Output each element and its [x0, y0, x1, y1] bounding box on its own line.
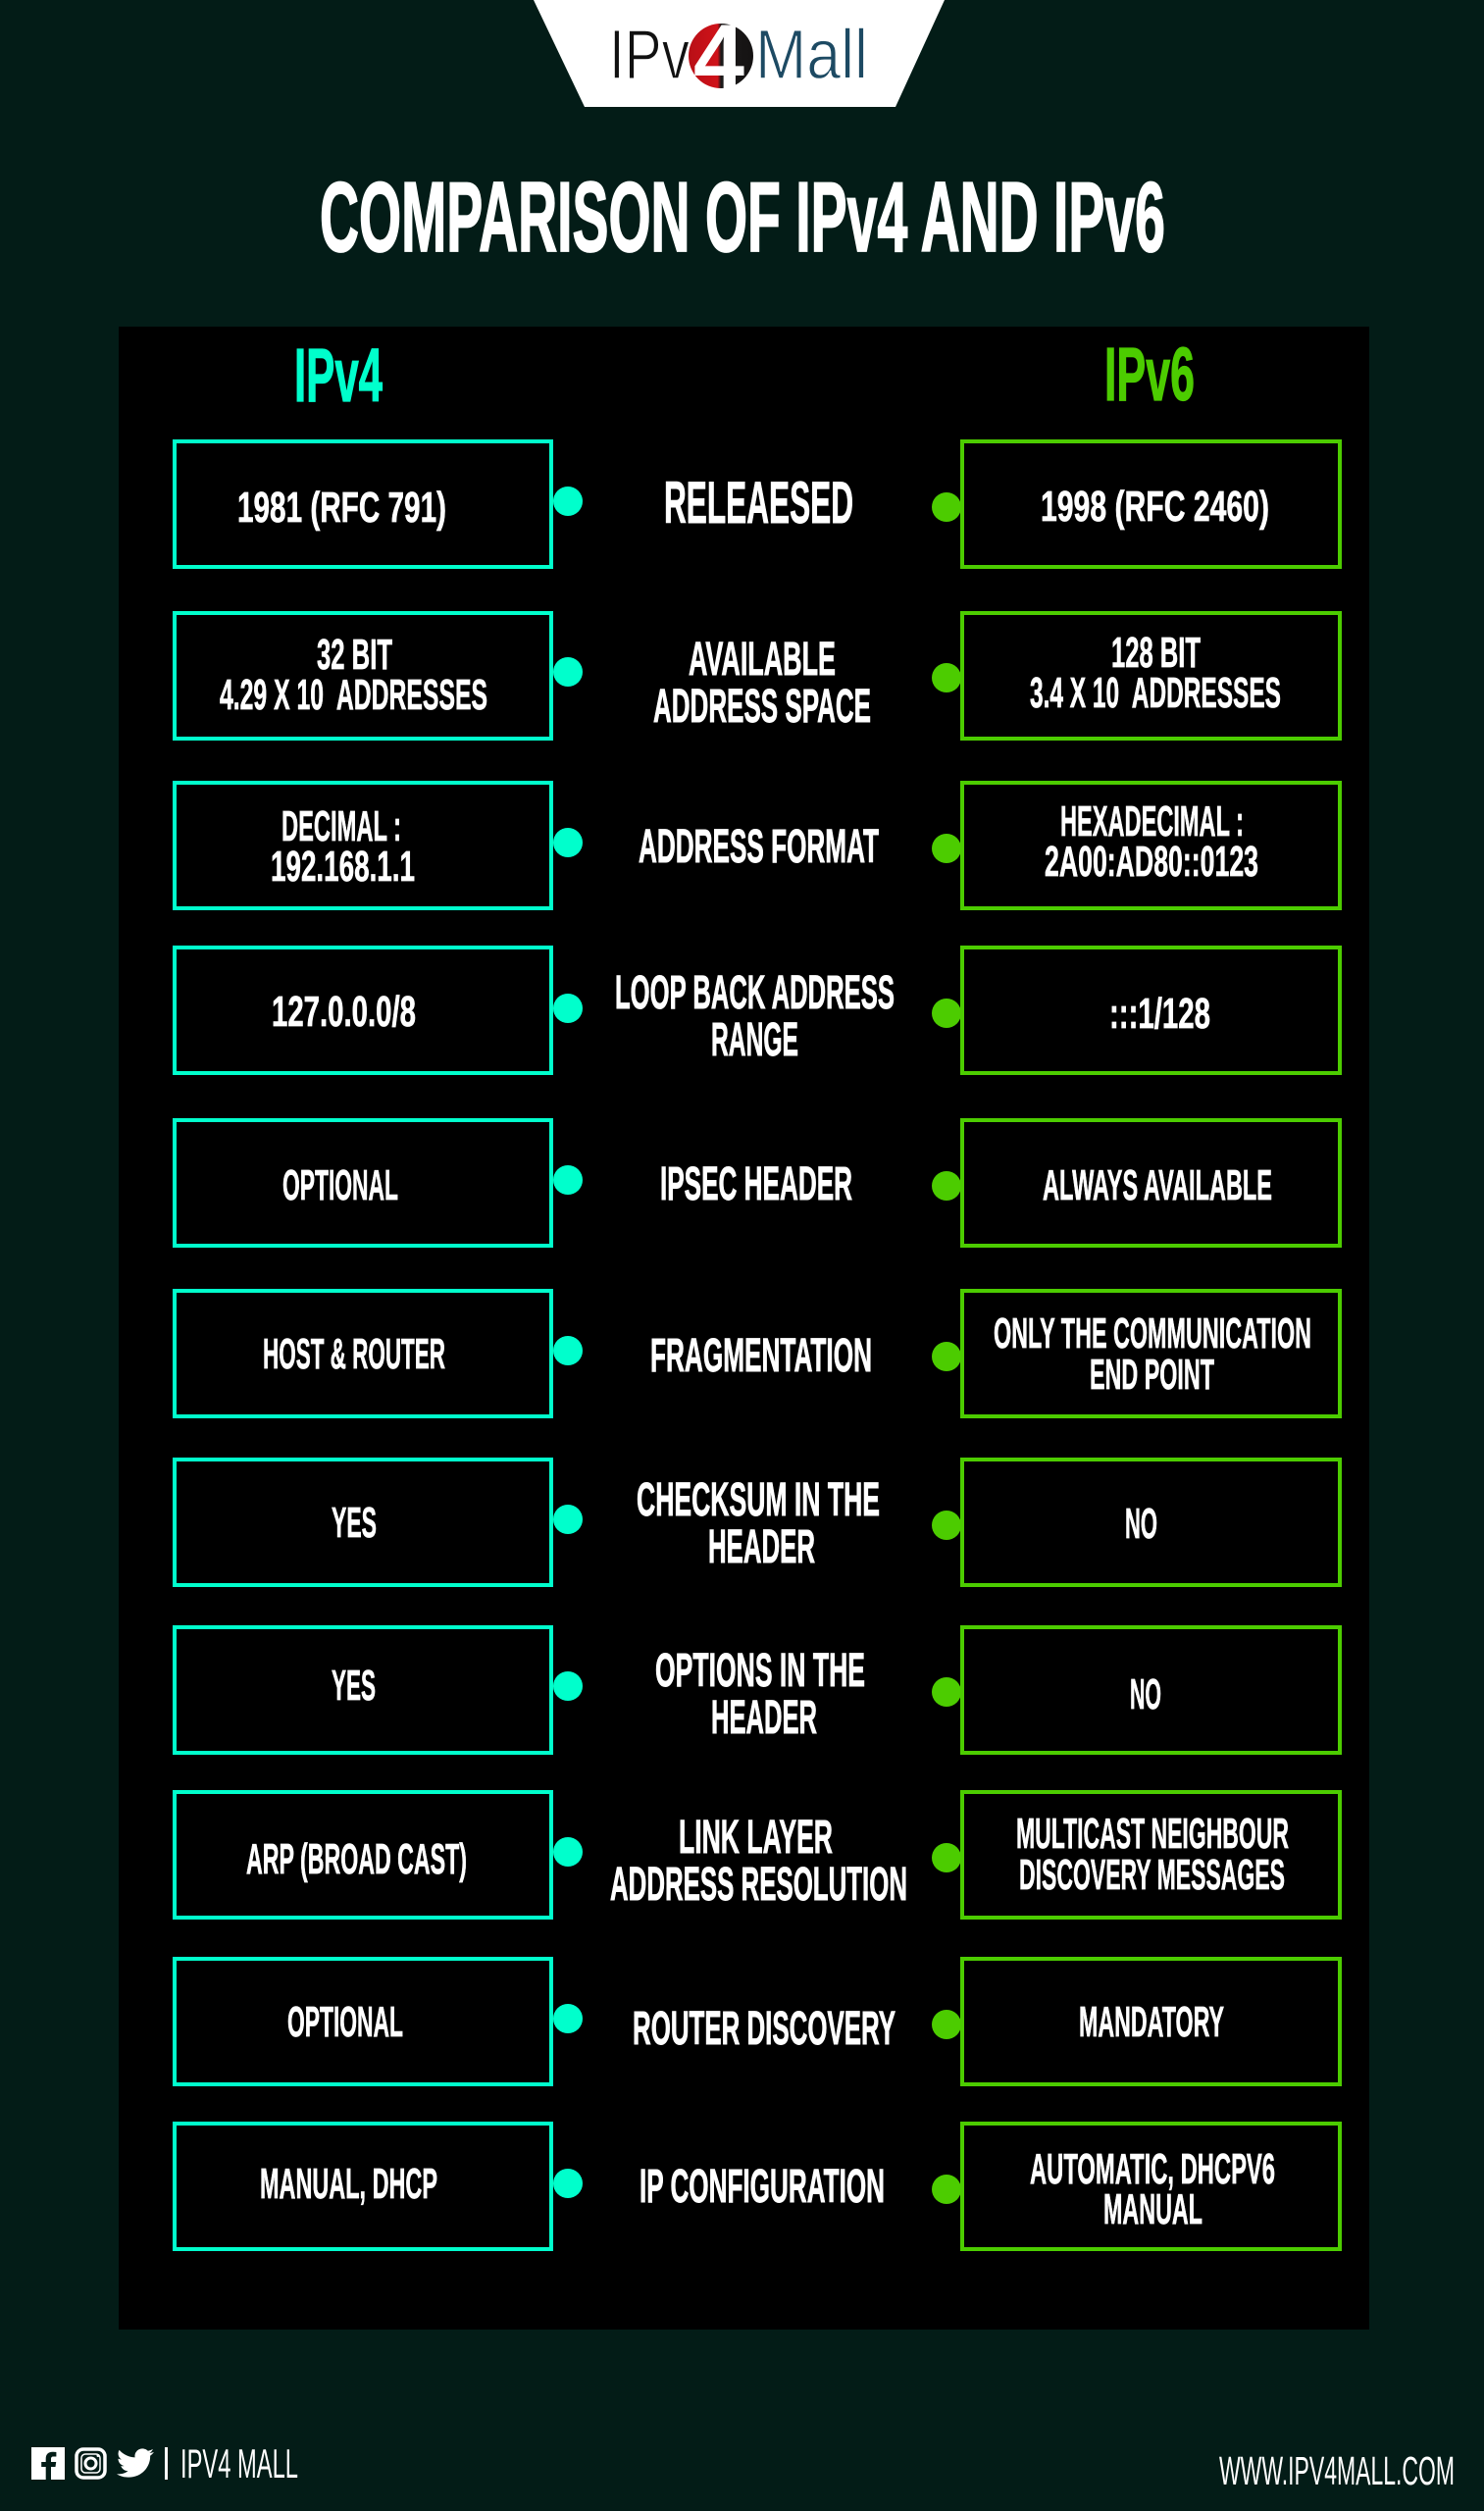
row: loop back address range — [175, 948, 1340, 1073]
row: ipsec header: IPSEC HEADER — [660, 1158, 852, 1210]
row: ipsec header — [175, 1120, 1340, 1246]
row: released — [175, 441, 1340, 567]
row: fragmentation — [175, 1291, 1340, 1416]
row: address format: 192.168.1.1 — [271, 843, 415, 891]
row: loop back address range: RANGE — [711, 1014, 798, 1066]
row: router discovery: MANDATORY — [1079, 1998, 1224, 2046]
row: checksum in the header: YES — [332, 1499, 377, 1547]
row: ipsec header: ALWAYS AVAILABLE — [1043, 1161, 1272, 1209]
row: checksum in the header: HEADER — [708, 1521, 815, 1573]
row: options in the header: YES — [332, 1662, 376, 1710]
row: available address space: 128 BIT — [1111, 629, 1201, 677]
row: available address space — [175, 613, 1340, 739]
row: loop back address range: LOOP BACK ADDRESS — [615, 967, 895, 1019]
row: loop back address range: 127.0.0.0/8 — [272, 988, 416, 1036]
row: available address space: ADDRESS SPACE — [653, 681, 871, 733]
row: address format: DECIMAL : — [281, 802, 401, 850]
row: ipsec header: OPTIONAL — [282, 1161, 398, 1209]
row: address format: HEXADECIMAL : — [1060, 797, 1244, 846]
heading: IPv4: IPv4 — [294, 333, 383, 418]
row: link layer address resolution — [175, 1792, 1340, 1918]
row: link layer address resolution: ARP (BROAD CAST) — [246, 1835, 467, 1883]
icon: twitter — [117, 2448, 154, 2478]
row: fragmentation: HOST & ROUTER — [263, 1330, 445, 1378]
icon: instagram — [77, 2449, 105, 2478]
row: fragmentation: FRAGMENTATION — [650, 1330, 872, 1382]
row: options in the header — [175, 1627, 1340, 1753]
row: ip configuration: MANUAL, DHCP — [260, 2160, 437, 2208]
row: loop back address range: :::1/128 — [1109, 990, 1210, 1038]
row: checksum in the header: NO — [1125, 1500, 1157, 1548]
row: link layer address resolution: LINK LAYER — [679, 1812, 833, 1864]
row: checksum in the header — [175, 1460, 1340, 1585]
row: options in the header: HEADER — [711, 1692, 817, 1744]
row: released: 1998 (RFC 2460) — [1041, 483, 1269, 531]
row: available address space: 3.4 X 10 ADDRESSES — [1030, 669, 1281, 717]
row: ip configuration: AUTOMATIC, DHCPV6 — [1030, 2145, 1275, 2193]
row: address format: ADDRESS FORMAT — [639, 821, 879, 873]
row: fragmentation: END POINT — [1090, 1351, 1214, 1399]
row: released: RELEAESED — [664, 470, 853, 536]
logo banner — [534, 0, 945, 108]
row: link layer address resolution: ADDRESS RESOLUTION — [610, 1859, 907, 1911]
heading: IPv6: IPv6 — [1104, 333, 1195, 417]
icon: facebook — [31, 2447, 65, 2480]
row: options in the header: OPTIONS IN THE — [655, 1645, 865, 1697]
row: address format: 2A00:AD80::0123 — [1045, 838, 1258, 886]
row: released: 1981 (RFC 791) — [237, 484, 446, 532]
row: address format — [175, 783, 1340, 908]
row: ip configuration: MANUAL — [1103, 2185, 1203, 2233]
row: available address space: 32 BIT — [317, 631, 392, 679]
row: checksum in the header: CHECKSUM IN THE — [637, 1474, 880, 1526]
row: router discovery — [175, 1959, 1340, 2084]
logo banner: IPv — [609, 17, 690, 94]
row: router discovery: OPTIONAL — [287, 1998, 403, 2046]
logo banner: Mall — [755, 17, 868, 94]
row: available address space: 4.29 X 10 ADDRESSES — [220, 671, 487, 719]
footer brand name — [165, 2440, 298, 2486]
panel: comparison table — [119, 327, 1369, 2330]
row: options in the header: NO — [1130, 1670, 1161, 1718]
row: available address space: AVAILABLE — [689, 634, 836, 686]
row: router discovery: ROUTER DISCOVERY — [633, 2003, 896, 2055]
row: ip configuration — [175, 2124, 1340, 2249]
row: ip configuration: IP CONFIGURATION — [640, 2161, 885, 2213]
logo banner: 4 — [693, 5, 744, 108]
footer brand name: IPV4 MALL — [180, 2440, 298, 2486]
